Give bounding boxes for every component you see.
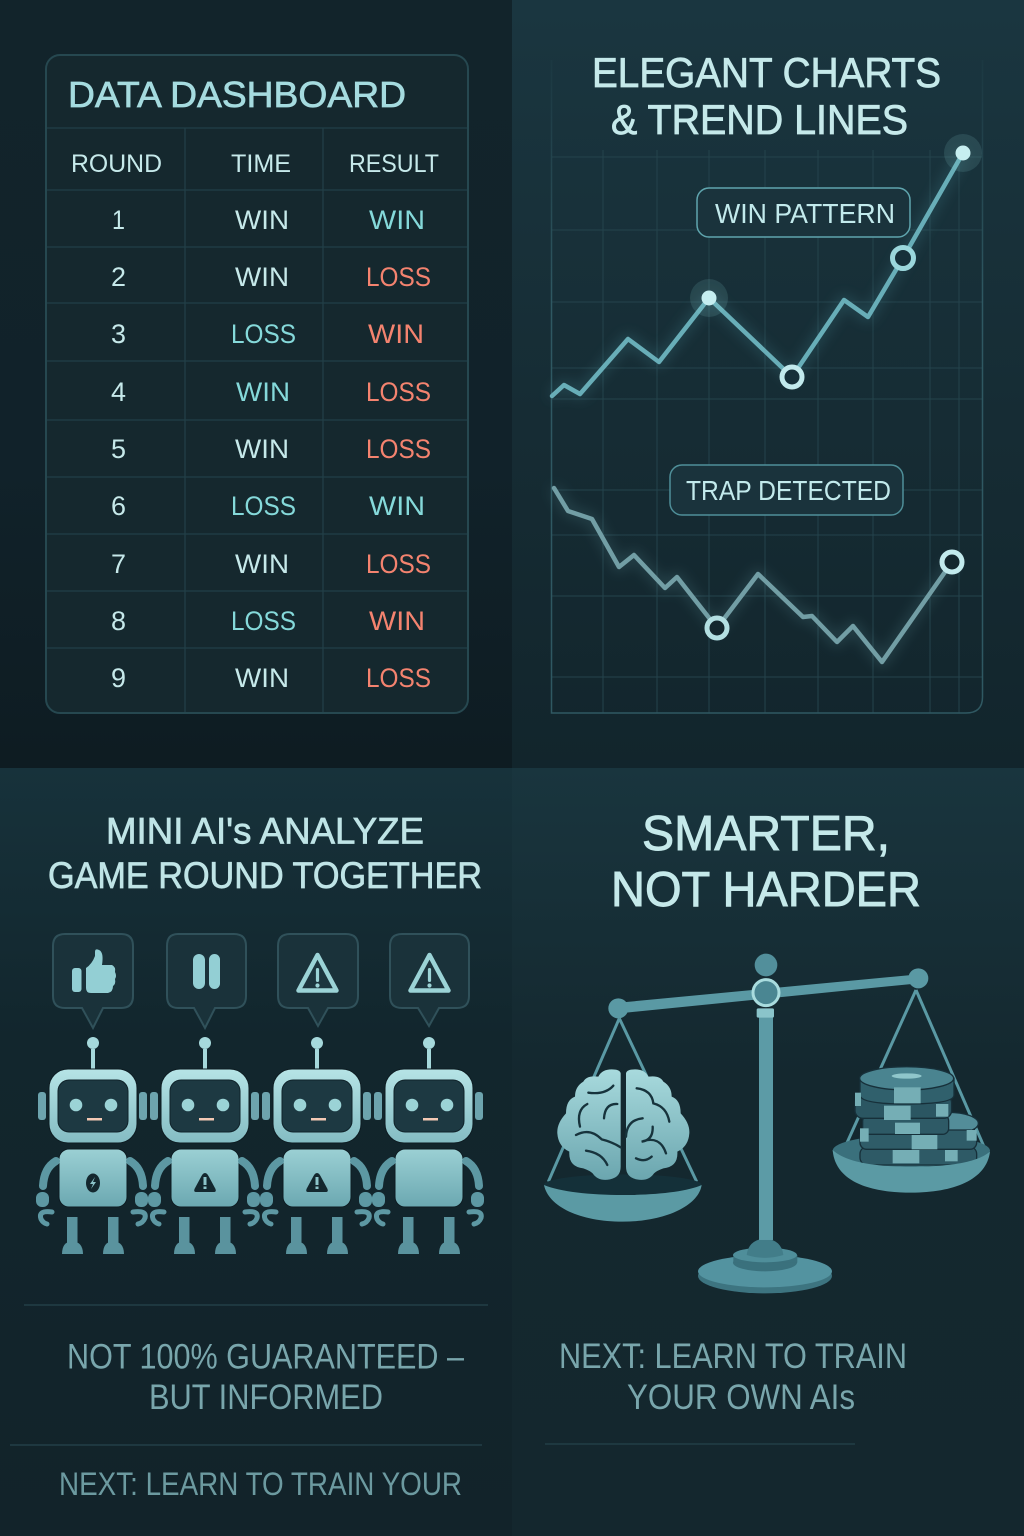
row 8: 8 [111,606,126,636]
speech bubble: thumbs up [53,934,133,1028]
heading: smarter not harder [611,807,921,917]
chart: trap falling line [554,488,962,662]
panel: data dashboard [0,0,512,768]
label: trap detected: TRAP DETECTED [686,475,891,506]
row 1 [112,205,425,235]
chest icon: warning [306,1173,328,1192]
caption: not guaranteed: BUT INFORMED [149,1378,383,1417]
heading: elegant charts: & TREND LINES [611,96,908,143]
heading: elegant charts: ELEGANT CHARTS [592,49,941,96]
caption: next train own AIs [559,1337,907,1417]
row 9: WIN [235,663,289,693]
row 4: LOSS [366,377,431,407]
heading: mini AIs analyze [48,810,482,896]
data point: trap low ring [707,618,727,638]
row 2: WIN [235,262,289,292]
speech bubble: pause [167,934,246,1028]
row 4: 4 [111,377,126,407]
left strings [548,1018,697,1182]
right pan bowl [833,1150,990,1193]
row 6: LOSS [231,491,296,521]
chart grid and frame [552,60,982,713]
icon: warning triangle [410,955,448,990]
table header row [71,150,439,178]
heading: data dashboard: DATA DASHBOARD [68,74,406,115]
row 3: WIN [368,319,424,349]
row 1: WIN [235,205,289,235]
row 8: WIN [369,606,425,636]
row 2: 2 [111,262,126,292]
row 7: LOSS [366,549,431,579]
brain icon [557,1069,689,1180]
pivot ring [753,980,779,1006]
caption: next train your: NEXT: LEARN TO TRAIN YOUR [59,1466,462,1502]
row 2: LOSS [366,262,431,292]
heading: smarter not harder: SMARTER, [642,807,890,861]
speech bubble: warning one [278,934,358,1026]
row 3 [111,319,424,349]
table header row: TIME [231,150,291,178]
row 3: LOSS [231,319,296,349]
row 3: 3 [111,319,126,349]
heading: elegant charts [592,49,941,143]
row 8 [111,606,425,636]
data point: top [944,134,982,172]
row 7: 7 [111,549,126,579]
row 6: 6 [111,491,126,521]
beam ends [608,968,928,1018]
poker chip stack [855,1067,978,1165]
row 6: WIN [369,491,425,521]
row 7: WIN [235,549,289,579]
caption: not guaranteed [67,1338,464,1417]
row 5: 5 [111,434,126,464]
label: win pattern [697,188,910,237]
caption: next train own AIs: YOUR OWN AIs [627,1378,855,1417]
heading: smarter not harder: NOT HARDER [611,863,921,917]
chart: win pattern rising line [552,134,982,396]
row 5 [111,434,431,464]
row 6 [111,491,425,521]
row 1: WIN [369,205,425,235]
row 5: WIN [235,434,289,464]
speech bubble: warning two [390,934,469,1026]
label: trap detected [670,465,903,515]
row 7 [111,549,431,579]
label: win pattern: WIN PATTERN [715,198,895,229]
row 4 [111,377,431,407]
robot two [148,1037,260,1254]
icon: thumbs up [72,949,116,993]
row 1: 1 [112,205,125,235]
row 9 [111,663,431,693]
row 9: LOSS [366,663,431,693]
beam [619,974,918,1013]
row 5: LOSS [366,434,431,464]
panel: mini AIs [0,768,512,1536]
table header row: RESULT [349,150,439,178]
top finial [755,954,777,976]
stand base [698,1238,832,1293]
balance scale illustration [544,954,990,1293]
chest icon: bolt [86,1174,100,1192]
row 9: 9 [111,663,126,693]
caption: not guaranteed: NOT 100% GUARANTEED – [67,1338,464,1376]
data point: upper ring [892,248,914,268]
row 2 [111,262,431,292]
data point: trap end ring [942,552,962,572]
heading: mini AIs analyze: MINI AI's ANALYZE [106,810,424,852]
table card [46,55,468,713]
panel: elegant charts [512,0,1024,768]
caption: next train own AIs: NEXT: LEARN TO TRAIN [559,1337,907,1376]
collar [757,1008,774,1018]
robot four [372,1037,484,1254]
data point: peak [690,279,728,317]
robot one [36,1037,148,1254]
icon: pause [193,954,220,989]
right strings [846,990,984,1147]
left pan bowl [544,1185,702,1222]
stand post [759,1017,773,1240]
chest icon: warning [194,1173,216,1192]
table header row: ROUND [71,150,162,178]
heading: mini AIs analyze: GAME ROUND TOGETHER [48,855,482,896]
left pan back [544,1174,702,1196]
data point: low ring [782,367,802,387]
row 8: LOSS [231,606,296,636]
robot three [260,1037,372,1254]
panel: smarter not harder [512,768,1024,1536]
icon: warning triangle [298,955,336,990]
row 4: WIN [236,377,290,407]
right pan back [833,1135,990,1167]
